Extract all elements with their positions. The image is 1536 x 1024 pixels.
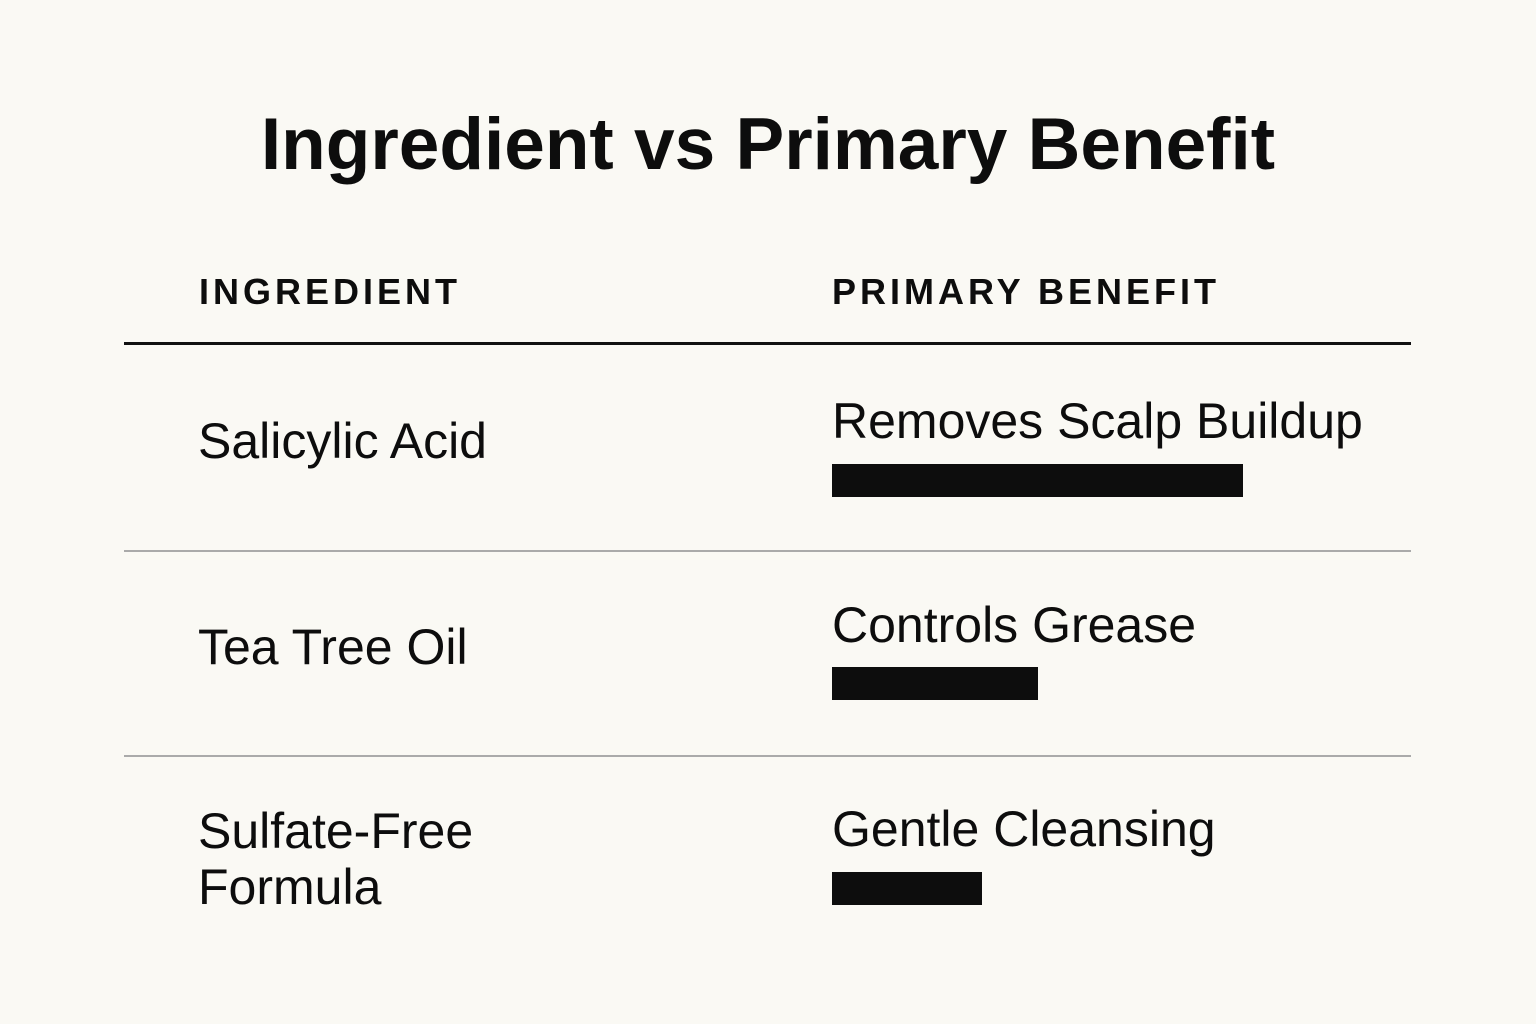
row 3 ingredient [198,803,473,915]
row 1 ingredient: Salicylic Acid [198,413,487,469]
row 2 ingredient: Tea Tree Oil [198,619,468,675]
header: ingredient: INGREDIENT [199,271,461,312]
row 2 bar [832,667,1038,700]
row 3 benefit: Gentle Cleansing [832,801,1216,857]
row 2 benefit: Controls Grease [832,597,1196,653]
row 1 benefit: Removes Scalp Buildup [832,393,1363,449]
row 1 bar [832,464,1243,497]
row 3 bar [832,872,982,905]
header: primary benefit: PRIMARY BENEFIT [832,271,1220,312]
title: Ingredient vs Primary Benefit [261,104,1275,185]
row 3 ingredient: Sulfate-Free [198,803,473,859]
row 3 ingredient: Formula [198,859,381,915]
